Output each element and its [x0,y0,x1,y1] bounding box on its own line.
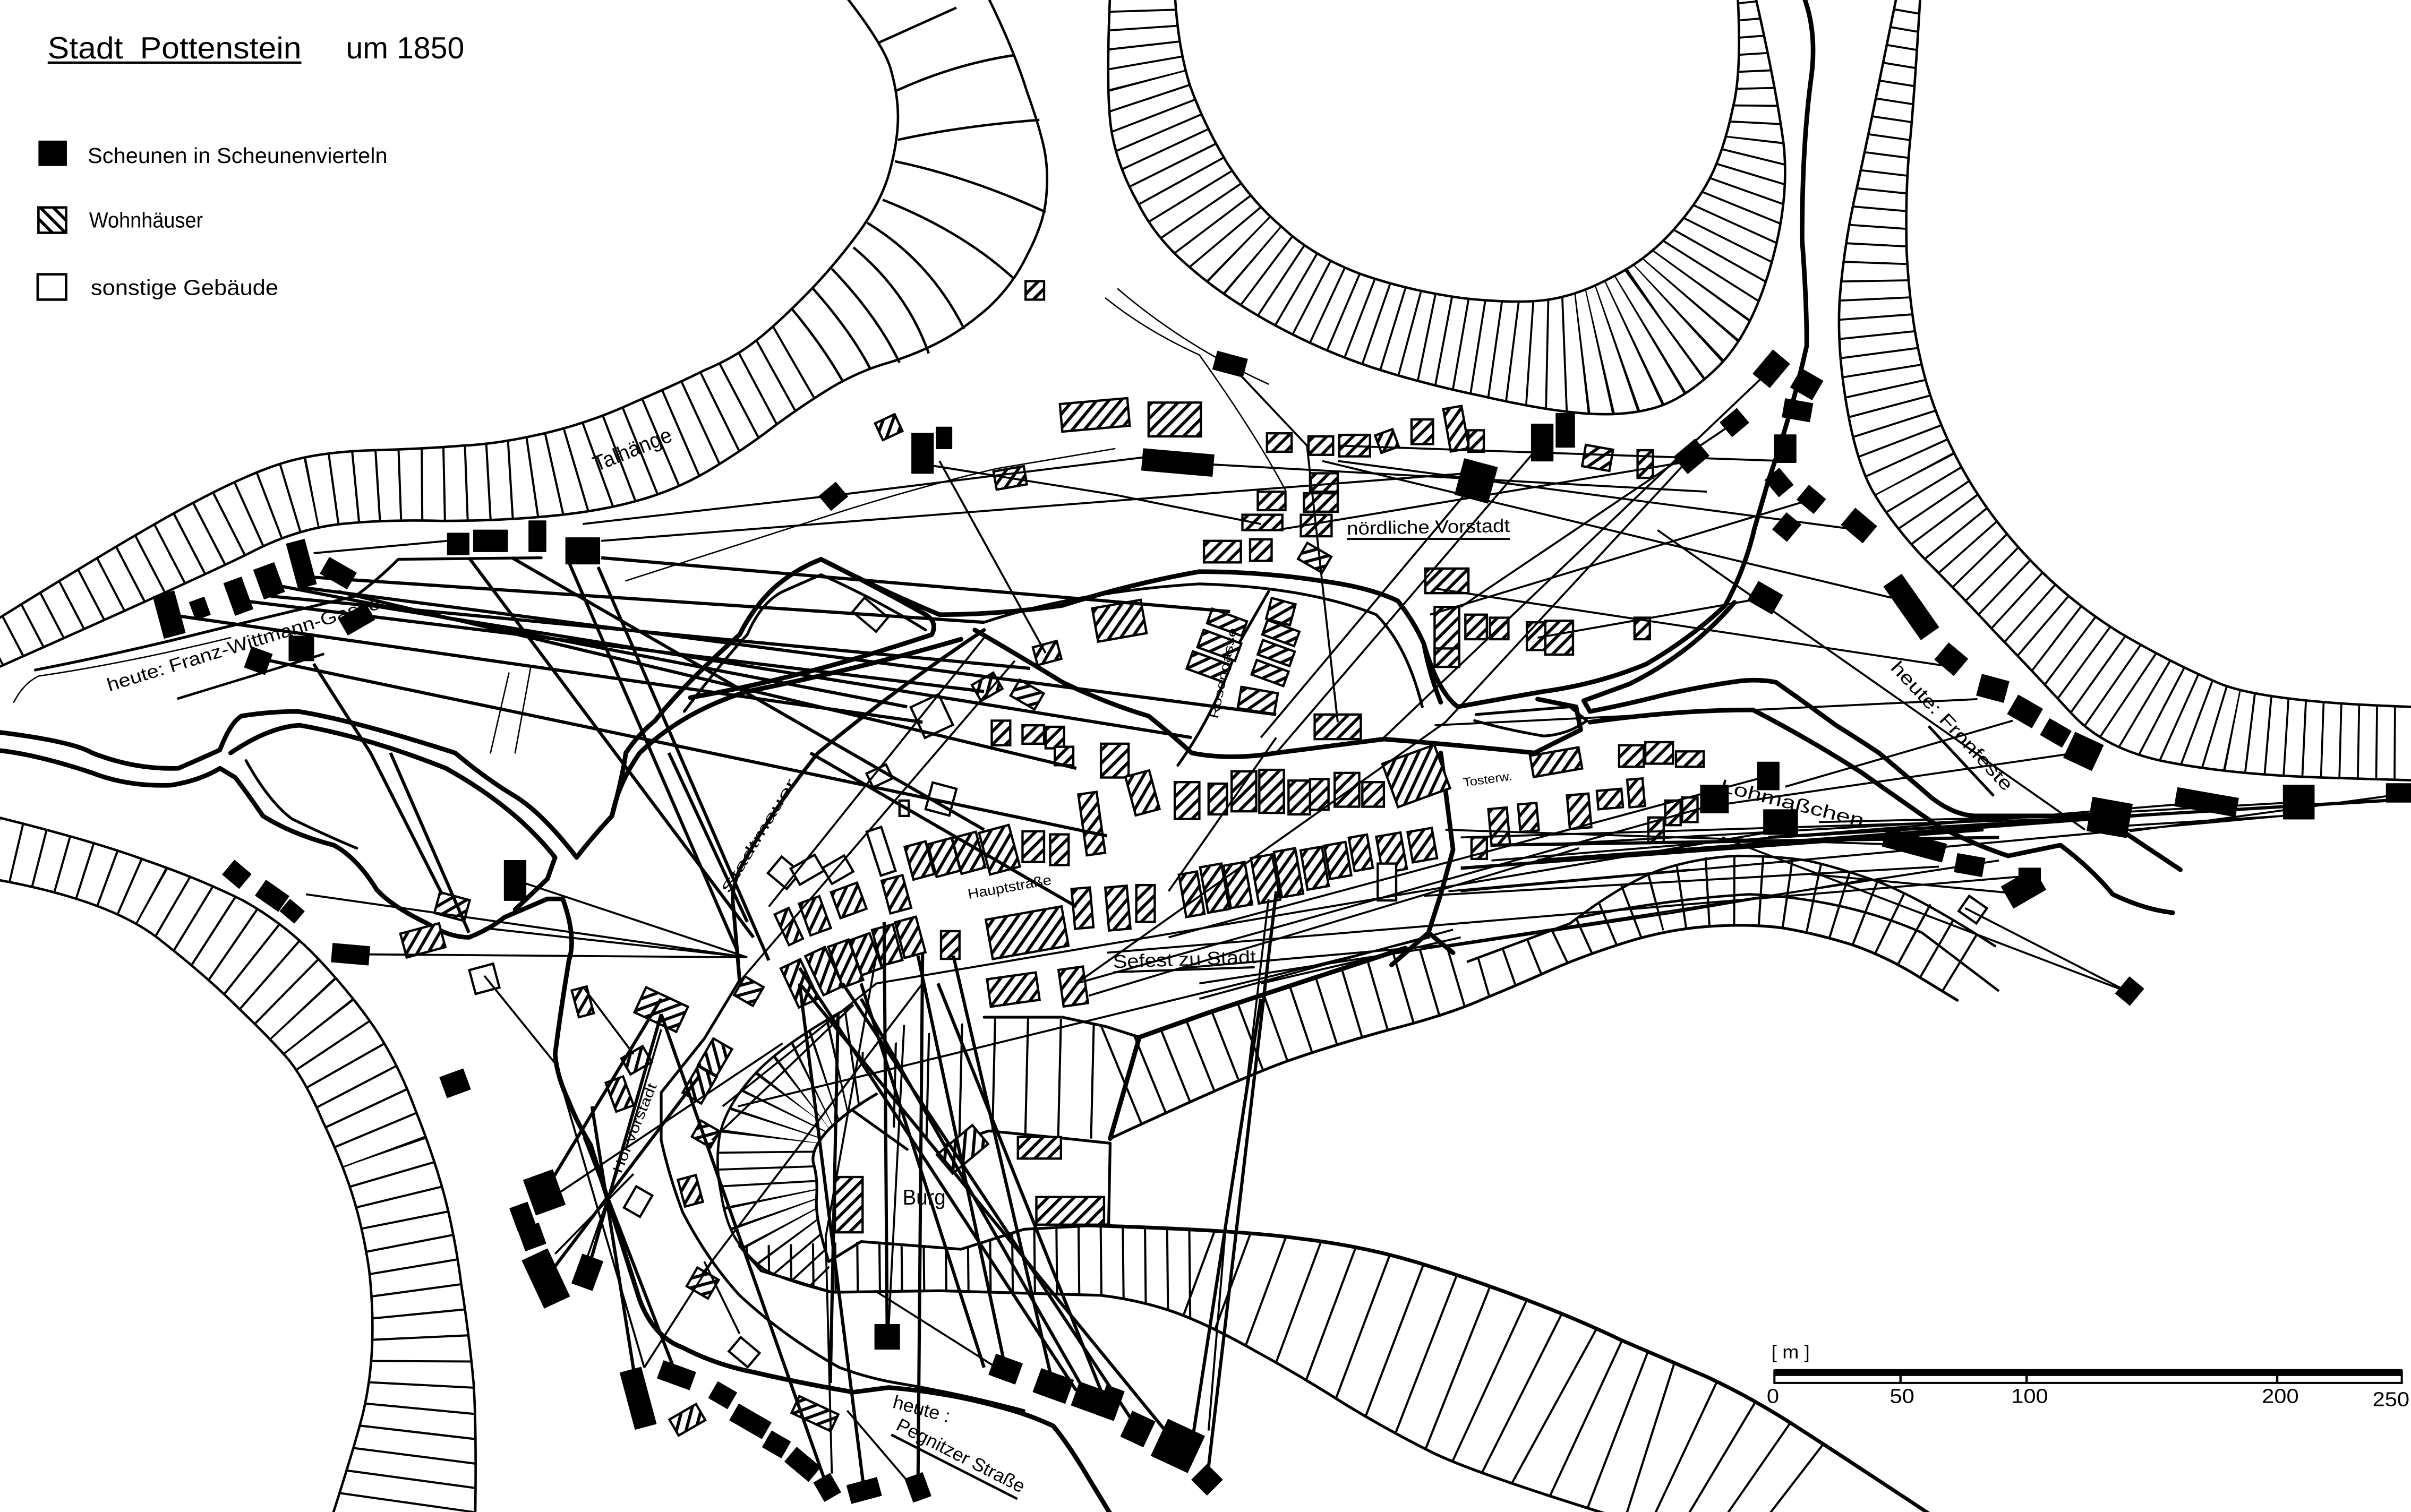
slope band: top centre arc [1108,0,1785,414]
map labels: Stadtmauer [718,776,799,896]
scale bar: 100 [2011,1385,2048,1407]
map labels: Sefest zu Stadt [1113,947,1256,972]
legend [38,141,388,300]
scale bar: [ m ] [1772,1343,1810,1363]
map labels: Hof Vorstadt [609,1080,660,1175]
legend item: Wohnhäuser: Wohnhäuser [89,208,203,232]
map labels: Rosengasse [1207,626,1239,720]
map labels: heute: Franz-Wittmann-Gasse [105,593,382,695]
slope band: bottom right [740,1225,1940,1512]
barns: black Scheunen [153,350,2411,1504]
legend item: Scheunen: Scheunen in Scheunenvierteln [88,143,388,168]
slope band: right side [1839,0,2411,780]
title: um 1850 [346,31,464,65]
map labels: heute : [891,1392,952,1427]
map labels: Talhänge [589,423,676,476]
legend item: sonstige Gebäude: sonstige Gebäude [91,276,278,300]
slope band: south of town [861,856,1999,1139]
map labels: Burg [903,1185,946,1209]
legend item: Wohnhäuser [38,208,203,233]
map labels: Tosterw. [1463,769,1513,789]
map labels [105,423,2017,1500]
map labels: Hauptstraße [967,872,1053,902]
scale bar: 200 [2262,1385,2299,1407]
map labels: heute: Fronfeste [1887,658,2017,795]
scale bar: 250 [2373,1388,2409,1410]
slope band: bottom left [0,816,476,1512]
title: Stadt Pottenstein [48,31,302,65]
legend item: sonstige Gebäude [38,274,278,300]
scale bar [1767,1343,2409,1410]
connection lines between barns and houses [169,364,2411,1490]
other buildings: white sonstige Gebäude [469,598,1987,1367]
scale bar: 50 [1890,1385,1914,1407]
scale bar: 0 [1767,1385,1779,1407]
map labels: Lohmaßchen [1718,776,1866,831]
map labels: Pegnitzer Straße [893,1415,1028,1497]
slope band: castle ring [717,1005,1110,1292]
title [48,31,464,65]
map labels: nördliche Vorstadt [1347,516,1510,539]
houses: hatched Wohnhäuser [400,281,1704,1436]
slope band: top left Talhänge [0,0,1047,670]
